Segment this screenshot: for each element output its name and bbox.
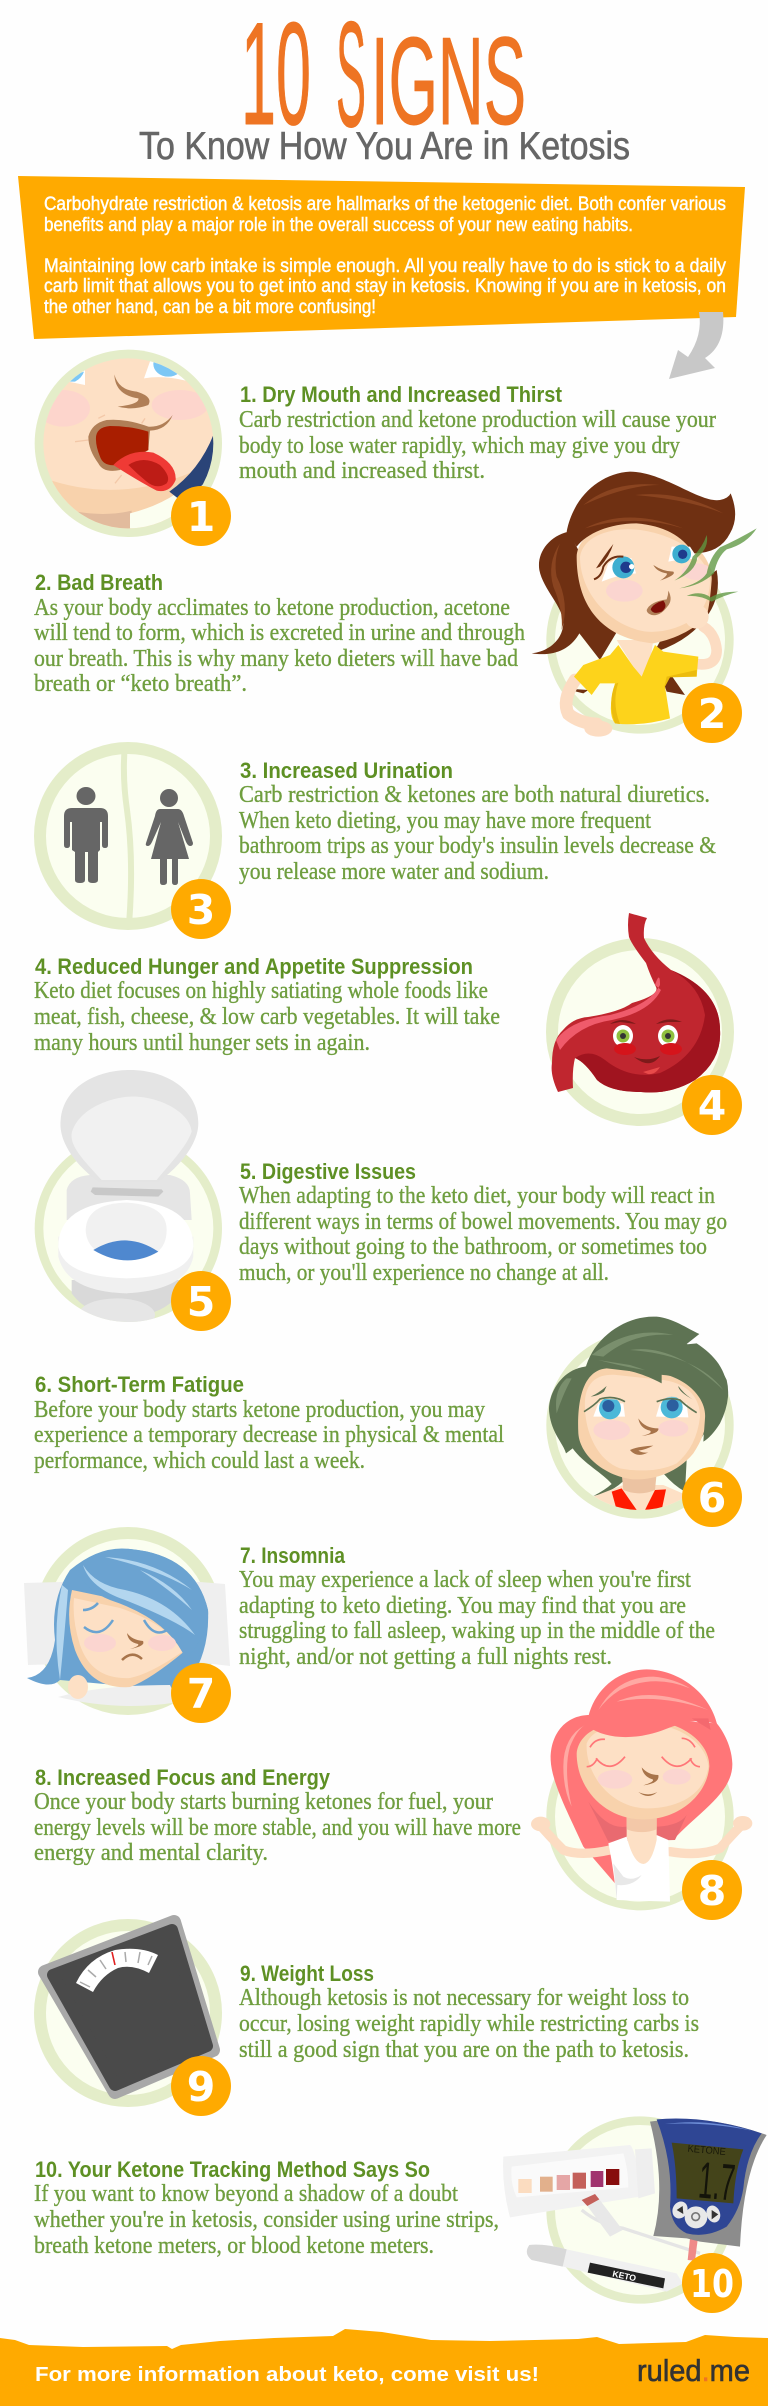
number badge: [171, 2056, 231, 2116]
panel: sign 5: [35, 1070, 727, 1332]
banner shape: [18, 176, 745, 339]
number badge: 1: [187, 493, 215, 541]
body text: [239, 1183, 727, 1286]
body text: When adapting to the keto diet, your body will react in: [239, 1183, 715, 1209]
panel: intro banner: [18, 176, 745, 339]
intro text: carb limit that allows you to get into and stay in ketosis. Knowing if you are in ketosis, on: [44, 276, 726, 297]
panel: sign 9: [40, 1922, 699, 2116]
intro text: benefits and play a major role in the overall success of your new eating habits.: [44, 215, 633, 236]
panel: sign 3: [40, 745, 716, 939]
heading: 9. Weight Loss: [240, 1961, 374, 1986]
body text: Before your body starts ketone production, you may: [34, 1397, 485, 1423]
heading: 10. Your Ketone Tracking Method Says So: [35, 2157, 430, 2182]
body text: [34, 2181, 499, 2259]
panel: sign 1: [20, 350, 716, 553]
heading: 7. Insomnia: [240, 1543, 346, 1568]
body text: [34, 1789, 521, 1866]
intro text: the other hand, can be a bit more confusing!: [44, 297, 376, 318]
body text: [34, 595, 525, 697]
body text: bathroom trips as your body's insulin levels decrease &: [239, 833, 716, 859]
body text: As your body acclimates to ketone production, acetone: [34, 595, 510, 621]
icon: dry mouth face: [34, 350, 222, 537]
body text: breath ketone meters, or blood ketone meters.: [34, 2233, 434, 2259]
icon: smiling stomach: [552, 913, 728, 1120]
icon: sleeping woman: [24, 1533, 230, 1709]
panel: sign 4: [34, 913, 742, 1135]
number badge: 8: [698, 1867, 726, 1915]
panel: footer: [0, 2329, 768, 2406]
title: [241, 0, 526, 158]
number badge: 9: [187, 2063, 215, 2111]
panel: sign 7: [24, 1533, 715, 1723]
body text: will tend to form, which is excreted in urine and through: [34, 620, 525, 646]
icon: meditating woman: [531, 1669, 752, 1910]
title: IGNS: [371, 13, 526, 151]
body text: Carb restriction and ketone production will cause your: [239, 407, 716, 433]
body text: night, and/or not getting a full nights rest.: [239, 1644, 612, 1670]
body text: performance, which could last a week.: [34, 1448, 365, 1474]
number badge: [682, 683, 742, 743]
body text: You may experience a lack of sleep when you're first: [239, 1567, 691, 1593]
body text: our breath. This is why many keto dieters will have bad: [34, 646, 518, 672]
heading: 4. Reduced Hunger and Appetite Suppression: [35, 954, 473, 979]
heading: 6. Short-Term Fatigue: [35, 1372, 244, 1397]
body text: still a good sign that you are on the path to ketosis.: [239, 2037, 689, 2063]
icon: toilet: [35, 1070, 222, 1332]
number badge: [171, 1271, 231, 1331]
body text: breath or “keto breath”.: [34, 671, 247, 697]
body text: energy and mental clarity.: [34, 1840, 268, 1866]
number badge: 3: [187, 886, 215, 934]
logo: ruled.me: ruled.me: [637, 2353, 750, 2388]
panel: sign 8: [34, 1669, 752, 1920]
heading: 2. Bad Breath: [35, 570, 163, 595]
footer call to action: For more information about keto, come visit us!: [35, 2364, 539, 2386]
heading: 5. Digestive Issues: [240, 1159, 416, 1184]
panel: sign 6: [34, 1317, 742, 1527]
body text: [239, 1567, 715, 1670]
number badge: [171, 1663, 231, 1723]
body text: Although ketosis is not necessary for weight loss to: [239, 1985, 689, 2011]
body text: struggling to fall asleep, waking up in the middle of the: [239, 1618, 715, 1644]
body text: If you want to know beyond a shadow of a doubt: [34, 2181, 458, 2207]
number badge: [682, 2253, 742, 2313]
number badge: 5: [187, 1278, 215, 1326]
number badge: [682, 1860, 742, 1920]
number badge: [682, 1467, 742, 1527]
body text: [239, 1985, 699, 2063]
heading: 1. Dry Mouth and Increased Thirst: [240, 382, 563, 407]
panel: sign 2: [34, 472, 757, 743]
intro text: [44, 194, 726, 318]
arrow: [669, 312, 723, 379]
number badge: 4: [698, 1082, 726, 1130]
heading: 8. Increased Focus and Energy: [35, 1765, 331, 1790]
body text: Once your body starts burning ketones for fuel, your: [34, 1789, 493, 1815]
body text: occur, losing weight rapidly while restricting carbs is: [239, 2011, 699, 2037]
number badge: [682, 1075, 742, 1135]
body text: energy levels will be more stable, and you will have more: [34, 1815, 521, 1841]
body text: mouth and increased thirst.: [239, 458, 485, 484]
body text: [34, 1397, 504, 1474]
body text: experience a temporary decrease in physical & mental: [34, 1422, 504, 1448]
number badge: 2: [698, 690, 726, 738]
body text: whether you're in ketosis, consider using urine strips,: [34, 2207, 499, 2233]
body text: Keto diet focuses on highly satiating whole foods like: [34, 978, 488, 1004]
number badge: 7: [187, 1670, 215, 1718]
subtitle: To Know How You Are in Ketosis: [139, 125, 630, 168]
icon: ketone test strips and meter: KETONE: [687, 2144, 727, 2158]
body text: When keto dieting, you may have more frequent: [239, 808, 651, 834]
icon: woman with bad breath: [532, 472, 757, 737]
heading: 3. Increased Urination: [240, 758, 453, 783]
body text: Carb restriction & ketones are both natural diuretics.: [239, 782, 710, 808]
number badge: [171, 486, 231, 546]
body text: days without going to the bathroom, or sometimes too: [239, 1234, 707, 1260]
icon: ketone test strips and meter: KETO: [612, 2269, 637, 2283]
body text: [239, 407, 716, 484]
number badge: 10: [690, 2262, 734, 2306]
footer band: [0, 2329, 768, 2406]
body text: many hours until hunger sets in again.: [34, 1030, 370, 1056]
body text: meat, fish, cheese, & low carb vegetables. It will take: [34, 1004, 500, 1030]
icon: tired woman: [546, 1317, 734, 1520]
body text: [239, 782, 716, 885]
body text: [34, 978, 500, 1056]
panel: sign 10: [34, 2116, 767, 2313]
body text: adapting to keto dieting. You may find that you are: [239, 1593, 686, 1619]
body text: much, or you'll experience no change at all.: [239, 1260, 609, 1286]
icon: ketone test strips and meter: [503, 2116, 767, 2304]
number badge: 6: [698, 1474, 726, 1522]
intro text: Maintaining low carb intake is simple enough. All you really have to do is stick to a daily: [44, 256, 726, 277]
number badge: [171, 879, 231, 939]
body text: body to lose water rapidly, which may give you dry: [239, 433, 680, 459]
icon: weighing scale: [40, 1922, 216, 2101]
body text: you release more water and sodium.: [239, 859, 549, 885]
icon: restroom man and woman: [40, 745, 216, 925]
